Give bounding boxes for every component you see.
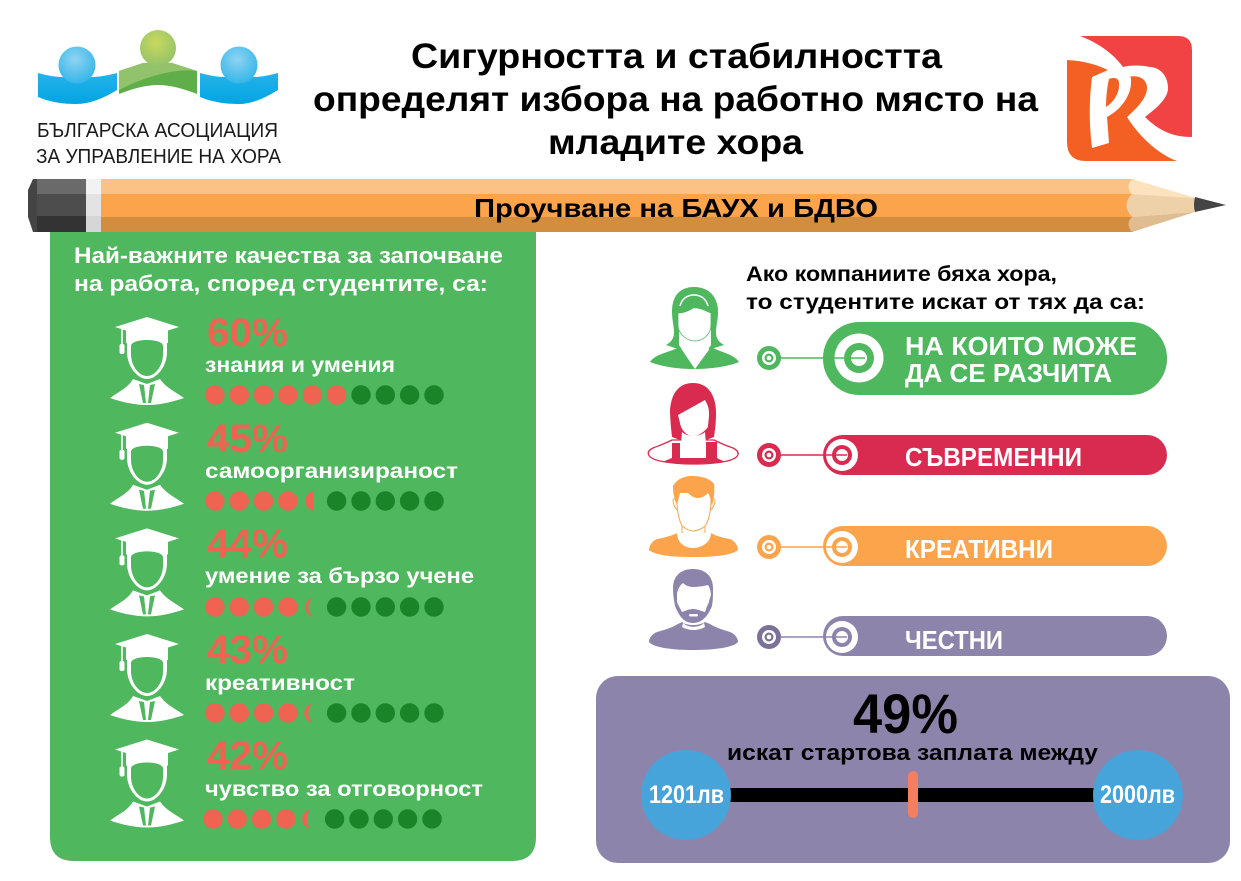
quality: 60% <box>110 311 444 405</box>
stat: 49%: 49% <box>853 682 958 745</box>
trait: honest: ЧЕСТНИ <box>905 625 1003 655</box>
panel: qualities <box>50 228 536 861</box>
logo: Bulgarian HR association <box>36 30 282 168</box>
quality: 43% <box>110 628 444 723</box>
heading: companies as people: то студентите искат от тях да са: <box>746 290 1145 314</box>
panel: starting salary <box>596 676 1230 863</box>
maximum salary: 2000лв <box>1100 781 1175 809</box>
trait: modern: СЪВРЕМЕННИ <box>905 442 1082 472</box>
heading: companies as people: Ако компаниите бяха хора, <box>746 262 1057 286</box>
quality: 45%: самоорганизираност <box>205 460 458 483</box>
title: младите хора <box>548 123 804 162</box>
logo: Bulgarian HR association: БЪЛГАРСКА АСОЦИАЦИЯ <box>37 120 278 142</box>
title: определят избора на работно място на <box>313 80 1039 119</box>
banner text: Проучване на БАУХ и БДВО <box>474 193 878 223</box>
quality: 42%: чувство за отговорност <box>205 778 483 801</box>
quality: 60%: знания и умения <box>205 354 395 377</box>
heading: companies as people <box>746 262 1145 314</box>
title <box>313 37 1039 162</box>
icon: woman with red hair <box>648 383 738 464</box>
maximum salary <box>1093 750 1183 840</box>
quality: 45% <box>110 417 458 511</box>
minimum salary <box>641 750 731 840</box>
icon: man with orange hair <box>649 476 738 557</box>
trait: reliable <box>757 322 1167 395</box>
heading: qualities: Най-важните качества за започване <box>74 243 503 268</box>
heading: qualities <box>74 243 503 296</box>
quality: 60%: 60% <box>207 311 288 355</box>
icon: woman with headband <box>650 287 739 369</box>
trait: modern <box>757 435 1167 475</box>
pencil banner <box>28 179 1226 232</box>
quality: 43%: 43% <box>207 628 288 672</box>
quality: 42%: 42% <box>207 734 288 778</box>
quality: 45%: 45% <box>207 417 288 461</box>
trait: reliable: НА КОИТО МОЖЕ <box>905 331 1137 361</box>
quality: 44% <box>110 522 474 617</box>
icon: bearded man <box>649 569 738 650</box>
trait: creative: КРЕАТИВНИ <box>905 534 1053 564</box>
trait: creative <box>757 526 1167 566</box>
heading: qualities: на работа, според студентите, са: <box>74 271 488 296</box>
title: Сигурността и стабилността <box>411 37 943 76</box>
salary range bar <box>725 771 1100 818</box>
quality: 44%: 44% <box>207 522 288 566</box>
quality: 42% <box>110 734 483 829</box>
trait: reliable: ДА СЕ РАЗЧИТА <box>905 358 1112 388</box>
salary caption: искат стартова заплата между <box>727 740 1099 765</box>
logo: PR <box>1067 36 1192 161</box>
quality: 43%: креативност <box>205 672 355 695</box>
trait: honest <box>757 616 1167 656</box>
minimum salary: 1201лв <box>649 781 724 809</box>
quality: 44%: умение за бързо учене <box>205 565 474 588</box>
logo: Bulgarian HR association: ЗА УПРАВЛЕНИЕ НА ХОРА <box>36 146 282 168</box>
